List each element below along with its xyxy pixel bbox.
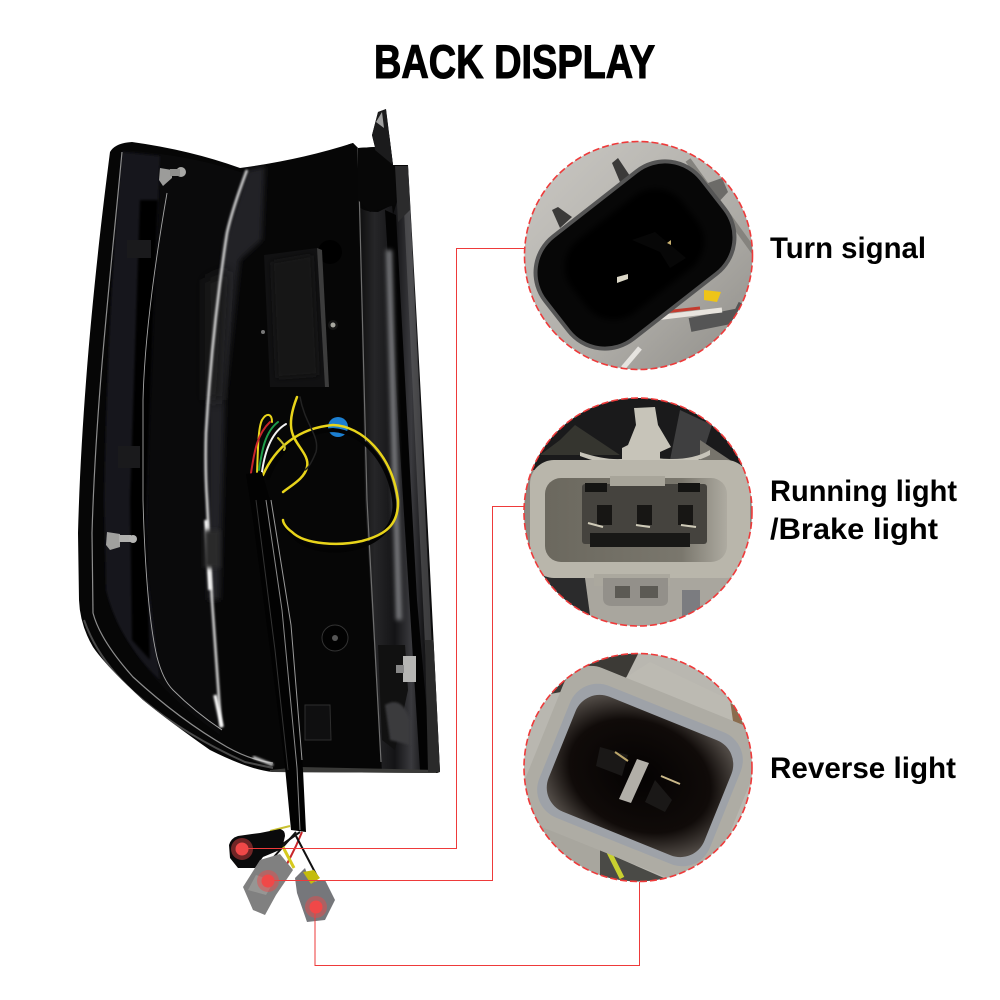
main cable <box>246 472 306 832</box>
marker: running and brake <box>257 870 279 892</box>
control box <box>261 240 342 387</box>
label: turn signal: Turn signal <box>770 232 926 265</box>
lamp housing <box>78 109 440 773</box>
leader line: reverse <box>315 882 640 966</box>
bottom latch <box>594 574 670 606</box>
mounting stud top <box>159 167 186 186</box>
mounting stud bottom <box>106 532 137 550</box>
connector tabs <box>552 158 728 228</box>
terminals and center key <box>596 747 680 812</box>
cavity rim <box>537 684 743 866</box>
dashed ring: turn signal <box>524 142 752 370</box>
connector: reverse <box>295 868 335 922</box>
latch frame <box>626 677 733 721</box>
dashed ring: reverse light <box>524 654 752 882</box>
connector: turn signal <box>229 829 285 868</box>
marker: turn signal <box>231 838 253 860</box>
title: BACK DISPLAY <box>374 35 655 88</box>
connector socket <box>617 240 671 283</box>
marker: reverse <box>305 896 327 918</box>
lamp surface details <box>84 109 441 773</box>
label: brake light: /Brake light <box>770 513 938 546</box>
screw hole lower <box>322 625 348 651</box>
connector shell <box>530 460 750 578</box>
label: running light: Running light <box>770 475 957 508</box>
tail light back view <box>78 109 441 922</box>
blue sticker <box>328 417 348 437</box>
socket <box>546 694 734 858</box>
wire harness <box>251 397 398 550</box>
connector: running and brake <box>243 854 293 915</box>
label: reverse light: Reverse light <box>770 752 956 785</box>
connector cavity <box>545 478 727 562</box>
terminals <box>582 476 707 547</box>
connector shell <box>526 666 752 878</box>
detail circle: reverse light <box>524 654 752 882</box>
detail circle: running and brake light <box>520 395 760 630</box>
connector wires <box>270 826 318 878</box>
leader line: running and brake <box>268 506 525 880</box>
retaining clip <box>580 407 710 464</box>
detail circle: turn signal <box>517 138 760 374</box>
connector shell <box>534 159 736 351</box>
dashed ring: running and brake <box>524 398 752 626</box>
lower metal clip <box>396 656 416 682</box>
leader line: turn signal <box>242 248 525 848</box>
wires in background <box>623 160 760 368</box>
